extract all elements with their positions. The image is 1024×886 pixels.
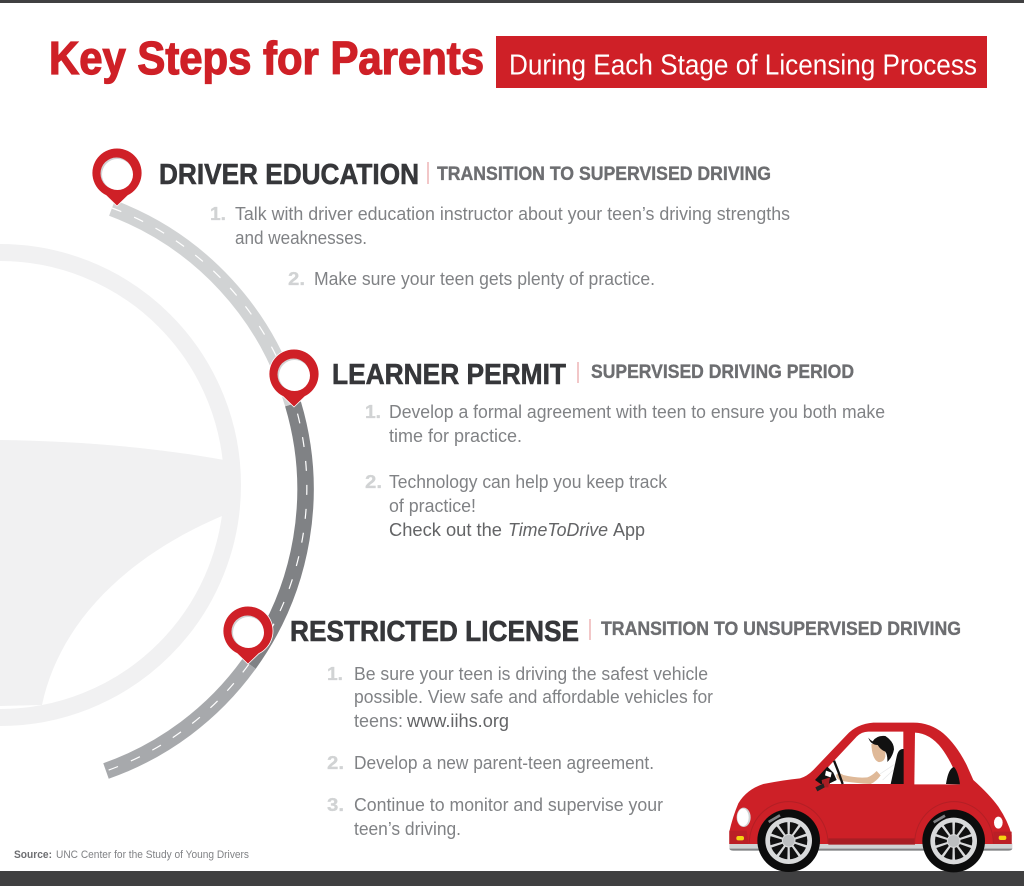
step 2: 2.	[365, 472, 382, 492]
step 1	[365, 402, 885, 446]
step 2	[365, 472, 668, 540]
step 1: Develop a formal agreement with teen to ensure you both make	[389, 402, 885, 422]
section: restricted license	[290, 616, 961, 839]
icon: red car with driver	[729, 723, 1012, 872]
step 1: Be sure your teen is driving the safest vehicle	[354, 664, 708, 684]
step 1	[210, 204, 790, 248]
step 1: Talk with driver education instructor about your teen’s driving strengths	[235, 204, 790, 224]
sill	[729, 843, 1012, 851]
subheading: transition to supervised driving: TRANSITION TO SUPERVISED DRIVING	[437, 164, 771, 185]
lights	[737, 808, 751, 827]
rear wheel	[922, 810, 985, 872]
step 1: possible. View safe and affordable vehicles for	[354, 687, 713, 707]
pin: learner permit	[269, 349, 319, 407]
step 2: TimeToDrive	[508, 520, 608, 540]
step 1: time for practice.	[389, 426, 522, 446]
step 3	[327, 795, 663, 839]
step 2: Check out the	[389, 520, 502, 540]
section: driver education	[159, 159, 790, 289]
body	[729, 723, 1012, 844]
section: learner permit	[332, 359, 885, 540]
step 1	[327, 664, 713, 731]
heading: driver education: DRIVER EDUCATION	[159, 159, 419, 191]
step 3: Continue to monitor and supervise your	[354, 795, 663, 815]
step 1: teens:	[354, 711, 403, 731]
driver	[836, 771, 881, 784]
step 3: 3.	[327, 795, 344, 815]
wheel arches	[749, 802, 828, 843]
step 2: Technology can help you keep track	[389, 472, 668, 492]
subheading: supervised driving period: SUPERVISED DRIVING PERIOD	[591, 362, 854, 383]
road	[106, 208, 307, 771]
step 1: 1.	[327, 664, 343, 684]
pin: driver education	[92, 148, 142, 206]
subtitle banner: During Each Stage of Licensing Process	[509, 50, 977, 82]
background: steering wheel	[0, 252, 232, 718]
step 2: Develop a new parent-teen agreement.	[354, 753, 654, 773]
step 3: teen’s driving.	[354, 819, 461, 839]
heading: learner permit: LEARNER PERMIT	[332, 359, 566, 391]
step 2: 2.	[288, 269, 305, 289]
subheading: transition to unsupervised driving: TRANSITION TO UNSUPERVISED DRIVING	[601, 619, 961, 640]
step 2: 2.	[327, 753, 344, 773]
front wheel	[757, 809, 820, 872]
windows	[826, 732, 903, 784]
step 2: of practice!	[389, 496, 476, 516]
bottom bar	[0, 871, 1024, 886]
step 1: www.iihs.org	[406, 711, 509, 731]
source note: Source:	[14, 849, 52, 861]
step 1: 1.	[210, 204, 226, 224]
pin: restricted license	[223, 606, 273, 664]
title: Key Steps for Parents	[49, 32, 484, 84]
steering wheel	[834, 761, 843, 784]
step 2: App	[613, 520, 645, 540]
subtitle banner	[496, 36, 987, 88]
step 1: and weaknesses.	[235, 228, 367, 248]
source note: UNC Center for the Study of Young Drivers	[56, 849, 249, 861]
step 1: 1.	[365, 402, 381, 422]
heading: restricted license: RESTRICTED LICENSE	[290, 616, 579, 648]
step 2: Make sure your teen gets plenty of practice.	[314, 269, 655, 289]
seats	[891, 749, 904, 784]
